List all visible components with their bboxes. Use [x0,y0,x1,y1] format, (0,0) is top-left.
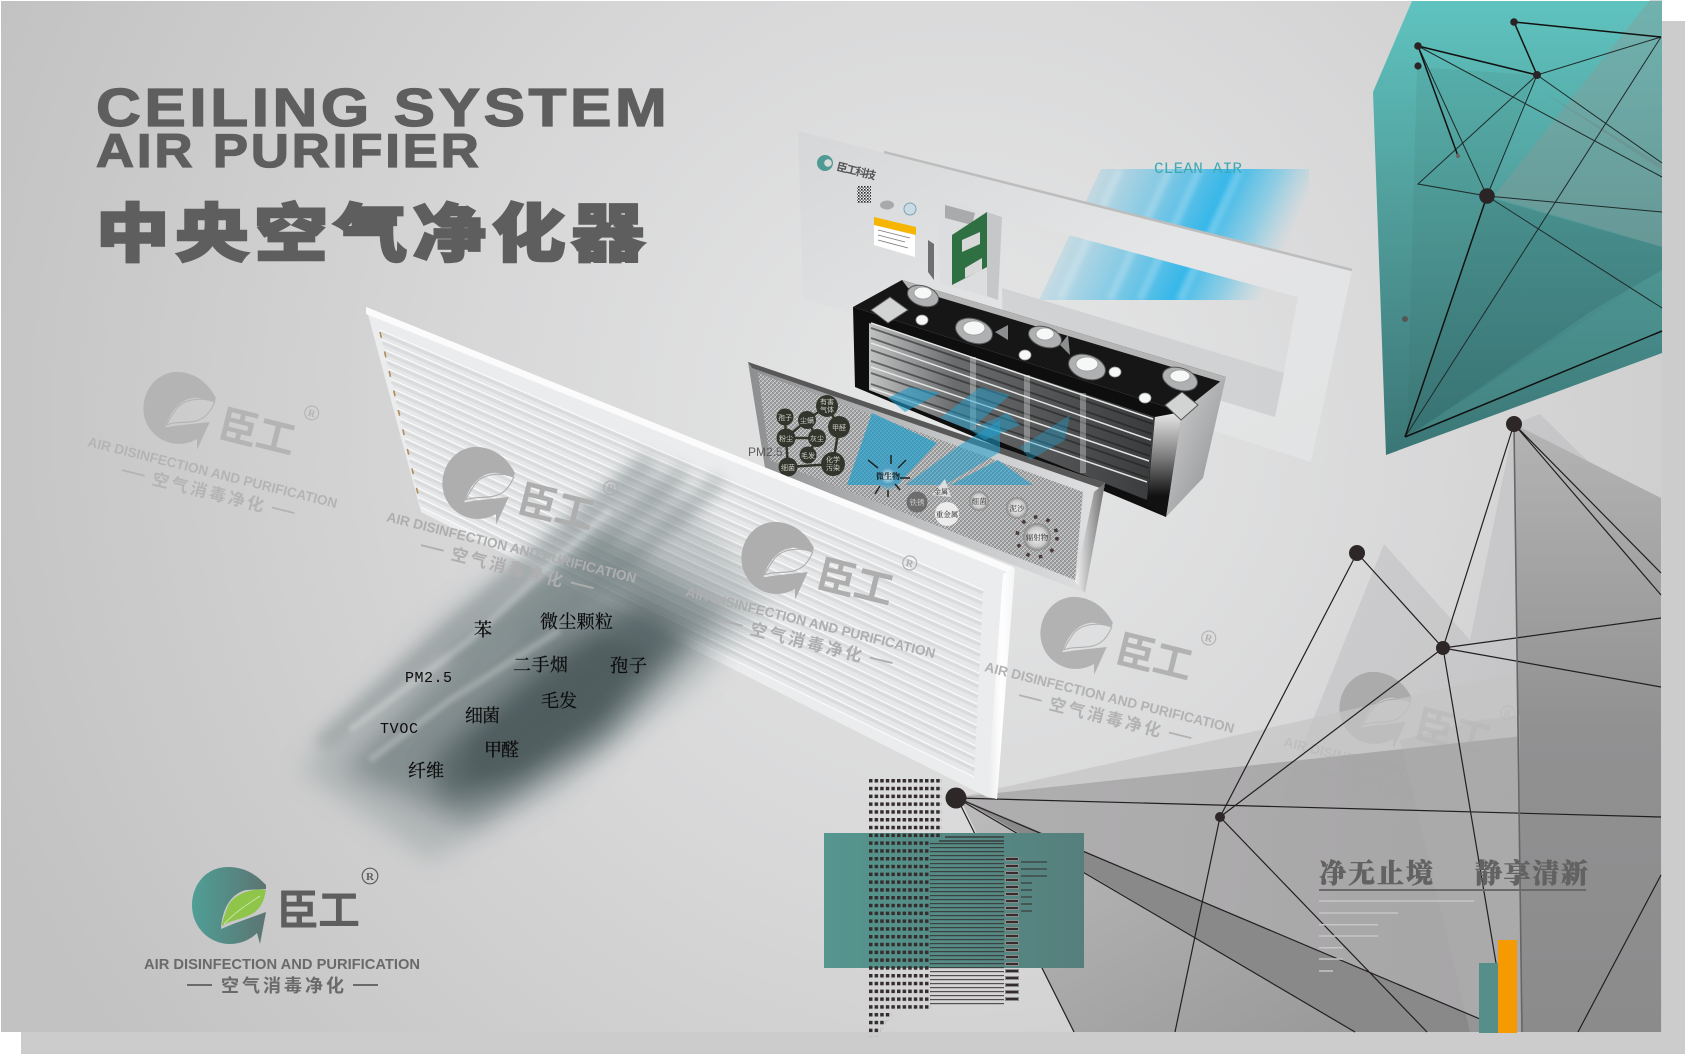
cloud and button icons [880,200,916,215]
warning label [874,217,916,257]
ionizer latches [871,297,1198,420]
ionizer knobs [905,282,1201,403]
stripe matrix [930,837,1004,1007]
watermark logo 1: 空气消毒净化 [150,469,266,516]
ionizer tube module [853,280,1226,517]
logo wordmark: 臣工 [277,887,360,934]
pollutant cluster: 毛发 [801,451,815,460]
polluted air plume [300,460,770,860]
radiation icon [1017,517,1057,557]
service compartment [938,198,1002,300]
pollutant labels [380,612,647,781]
bacteria icon [969,491,989,511]
title english: CEILING SYSTEM [96,78,670,138]
hepa filter panel [748,362,1105,593]
watermark logo 3: AIR DISINFECTION AND PURIFICATION [684,584,937,661]
network lines lower right [957,424,1661,1032]
watermark logo 2: AIR DISINFECTION AND PURIFICATION [385,509,638,586]
pollutant labels: 细菌 [465,706,500,726]
teal faceted polygon top right [1373,0,1662,455]
grille side bar [987,568,1015,799]
radiation icon: 辐射物 [1026,532,1049,542]
slogan placeholder lines [1319,901,1474,971]
watermark logo 4: 臣工 [1112,628,1197,689]
filter pm2.5 label: PM2.5 [748,445,783,459]
watermark logo 4: AIR DISINFECTION AND PURIFICATION [983,659,1236,736]
slogan [1319,858,1588,890]
metal icon [932,479,951,497]
dot matrix [869,779,942,1036]
pollutant cluster: 有害 [820,397,834,406]
QR code [857,186,871,203]
watermark logo 2: R [605,483,616,496]
watermark logo 4 [978,579,1256,758]
pollutant cluster: 甲醛 [832,423,846,432]
heavy metal icon: 重金属 [936,509,958,519]
pollutant labels: 微尘颗粒 [540,612,613,632]
rust icon: 铁锈 [910,497,925,507]
pollutant labels: 苯 [474,620,492,640]
watermark logo 3: 空气消毒净化 [748,619,864,666]
watermark logo 2: 空气消毒净化 [449,544,565,591]
slogan: 静享清新 [1475,858,1588,889]
ionizer glass front [869,323,1155,500]
clean air label: CLEAN AIR [1154,160,1242,178]
pollutant cluster: 化学 [826,455,840,464]
window inner wall [1002,288,1284,417]
pollutant cluster: 孢子 [778,413,792,422]
panel logo: 臣工科技 [835,159,877,183]
watermark logo 2: 臣工 [514,478,599,539]
microbe icon: 微生物 [876,471,900,481]
logo chinese line: 空气消毒净化 [221,975,344,996]
bacteria icon: 细菌 [972,496,987,506]
ionizer silver end [1147,412,1182,517]
pollutant labels: 纤维 [408,761,444,781]
watermark logo 4: R [1203,633,1214,646]
network nodes lower right [946,416,1522,822]
slogan: 净无止境 [1319,858,1433,889]
registered mark [362,868,378,884]
rust icon [906,492,928,512]
pollutant cluster [776,395,850,476]
grille slats [380,330,983,777]
watermark logo 4: 空气消毒净化 [1047,694,1163,741]
watermark logo 3: 臣工 [813,553,898,614]
title chinese: 中央空气净化器 [96,199,645,270]
pollutant cluster: 粉尘 [779,434,793,443]
watermark logo 1: AIR DISINFECTION AND PURIFICATION [86,434,339,511]
watermark logo 3 [679,504,957,683]
pollutant labels: 毛发 [541,691,577,711]
front grille panel [366,307,1015,799]
blue airflow on filter [847,387,1070,485]
title english: AIR PURIFIER [96,125,482,177]
ionizer top face [853,280,1226,412]
pollutant cluster: 气体 [820,405,834,414]
logo G mark [192,867,266,944]
pollutant labels: 孢子 [610,656,647,676]
sand icon [1006,497,1028,519]
main logo [144,867,420,996]
green circuit board [952,212,987,285]
teal halftone block [824,779,1084,1036]
pollutant cluster: 灰尘 [810,434,824,443]
short lines [1021,862,1047,911]
watermark logo 5: 空气消毒净化 [1346,769,1462,816]
grey geometric facets [960,414,1661,1032]
panel logo [817,155,877,183]
logo leaf [222,890,266,926]
ionizer side pleats [1166,377,1226,517]
accent bars [1479,940,1517,1033]
registered mark: R [366,871,375,883]
watermark logo 1 [81,354,359,533]
tick column [1005,857,1019,1004]
pollutant labels: 二手烟 [513,655,568,675]
teal network nodes [1402,18,1541,322]
watermark logo 5: 臣工 [1411,703,1496,764]
watermark logo 1: R [306,408,317,421]
pollutant labels: TVOC [380,721,418,738]
clean air blue beam [1039,169,1309,300]
pollutant labels: PM2.5 [405,670,452,687]
watermark logo 3: R [904,558,915,571]
pollutant cluster: 污染 [826,463,840,472]
watermark logo 5: AIR DISINFECTION AND PURIFICATION [1282,734,1535,811]
heavy metal icon [935,502,959,526]
title english [96,78,670,177]
microbe icon [868,455,910,497]
pollutant labels: 甲醛 [484,740,519,760]
metal icon: 金属 [934,487,948,496]
watermark logo 1: 臣工 [215,403,300,464]
watermark logo 2 [380,429,658,608]
watermark logo 5: R [1502,708,1513,721]
teal network lines [1405,22,1662,437]
pollutant cluster: 细菌 [781,463,795,472]
sand icon: 泥沙 [1010,503,1025,513]
rear mounting panel [798,131,1352,462]
watermark logo 5 [1277,654,1555,833]
logo english line: AIR DISINFECTION AND PURIFICATION [144,957,420,973]
filter mesh [758,373,1083,580]
pollutant cluster: 尘螨 [800,416,814,425]
